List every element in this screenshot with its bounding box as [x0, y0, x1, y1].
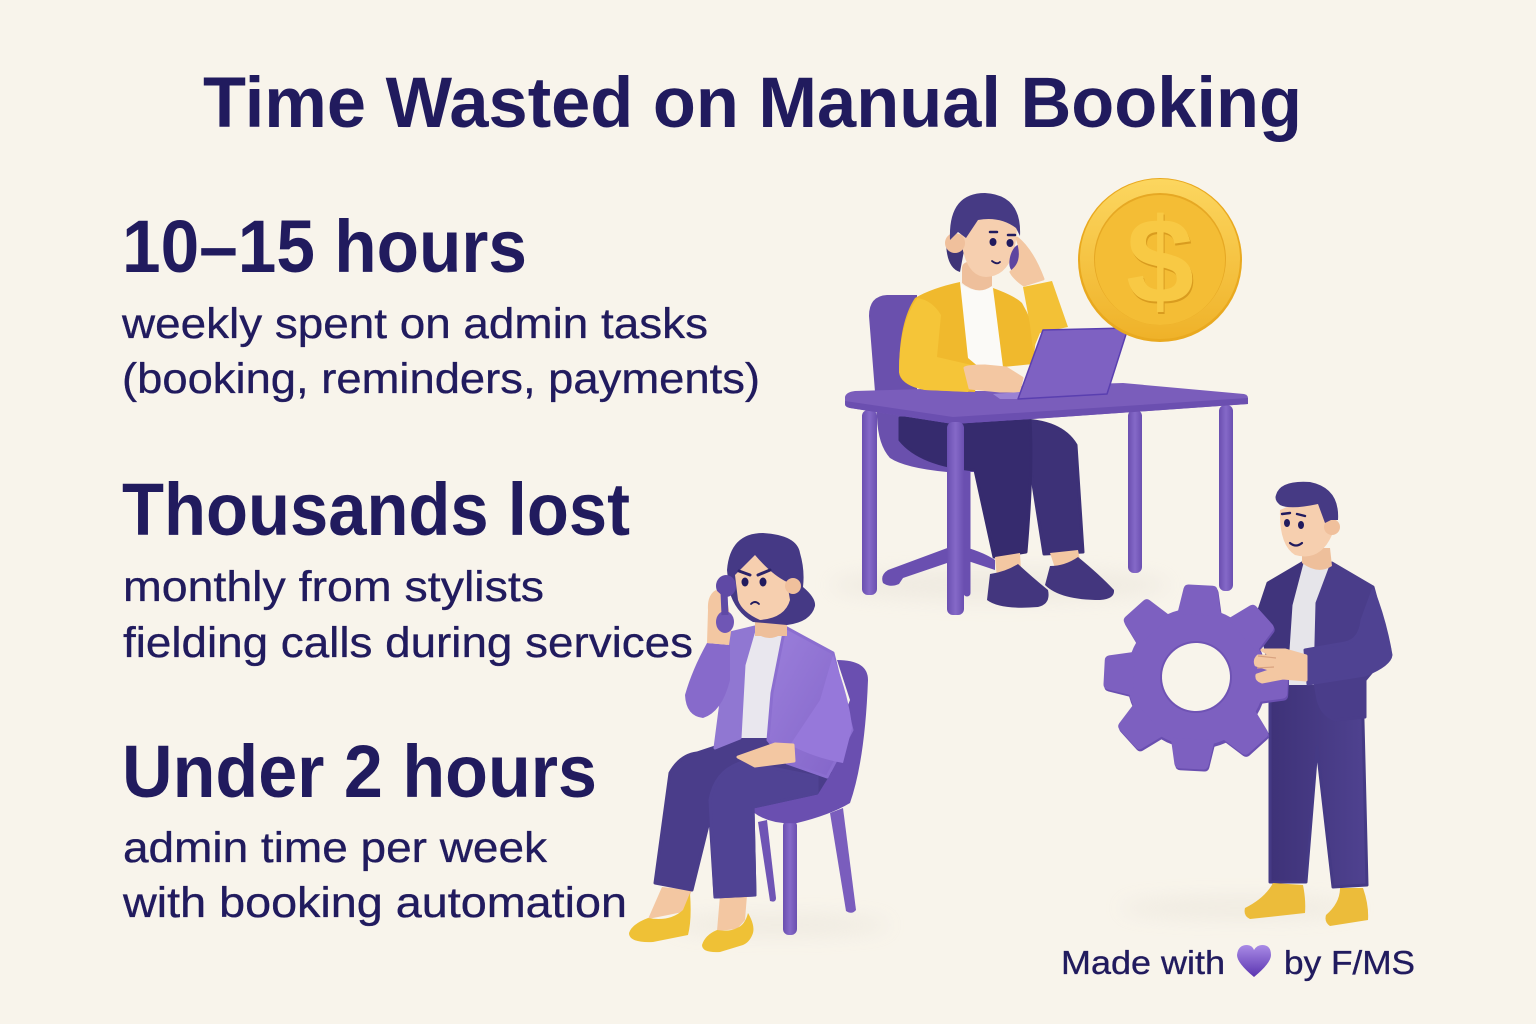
stat description: booking automation: [122, 824, 627, 927]
torso: white shirt and yellow cardigan: [899, 281, 1068, 392]
shirt: [741, 627, 785, 738]
footer credit: by F/MS: [1284, 944, 1415, 981]
stat block: 10–15 hours: [121, 205, 760, 403]
head on phone: [945, 193, 1043, 290]
stat description: admin tasks: weekly spent on admin tasks: [121, 300, 708, 348]
icon: gold dollar coin: $: [1127, 195, 1195, 331]
trousers: [1270, 680, 1367, 887]
hand on gear: [1255, 650, 1306, 682]
stat description: admin tasks: (booking, reminders, payments): [122, 355, 760, 403]
stat description: booking automation: with booking automation: [122, 879, 627, 927]
illustration: person at desk on the phone: [830, 193, 1248, 615]
jacket: [685, 627, 852, 777]
laptop: [993, 328, 1128, 399]
shirt: [1289, 563, 1332, 685]
stat description: fielding calls: [123, 563, 693, 667]
stat heading: Under 2 hours: Under 2 hours: [122, 730, 597, 813]
chair: [753, 660, 868, 935]
trousers and skin: [648, 738, 830, 931]
jacket: [1258, 563, 1391, 720]
icon: purple heart: [1237, 945, 1271, 977]
gear: [1099, 580, 1294, 776]
raised hand and phone: [707, 575, 736, 645]
footer credit: Made with: [1061, 944, 1225, 981]
stat block: Thousands lost: [122, 468, 693, 667]
hand on lap: [738, 744, 794, 766]
icon: gold dollar coin: [1078, 178, 1242, 342]
trousers and shoes: [900, 418, 1114, 608]
shoes: [1245, 883, 1368, 926]
footer credit: [1061, 944, 1415, 981]
stat description: fielding calls: fielding calls during services: [123, 619, 693, 667]
desk top: [845, 383, 1248, 424]
icon: gold dollar coin: $: [1126, 193, 1194, 329]
stat heading: Thousands lost: Thousands lost: [122, 468, 630, 551]
back desk legs: [862, 405, 1233, 595]
stat description: admin tasks: [121, 300, 760, 403]
stat description: fielding calls: monthly from stylists: [123, 563, 544, 611]
hand typing: [965, 366, 1022, 391]
title: Time Wasted on Manual Booking: [203, 64, 1302, 143]
stat block: Under 2 hours: [122, 730, 627, 927]
illustration: woman on phone in chair: [629, 533, 890, 952]
stat description: booking automation: admin time per week: [123, 824, 548, 872]
front desk leg: [947, 422, 964, 615]
head and hair: [1276, 482, 1340, 570]
office chair: [869, 295, 995, 593]
yellow shoes: [629, 893, 753, 952]
illustration: man holding gear: [1099, 482, 1391, 926]
stat heading: 10–15 hours: 10–15 hours: [122, 205, 527, 288]
head and hair: [727, 533, 815, 638]
